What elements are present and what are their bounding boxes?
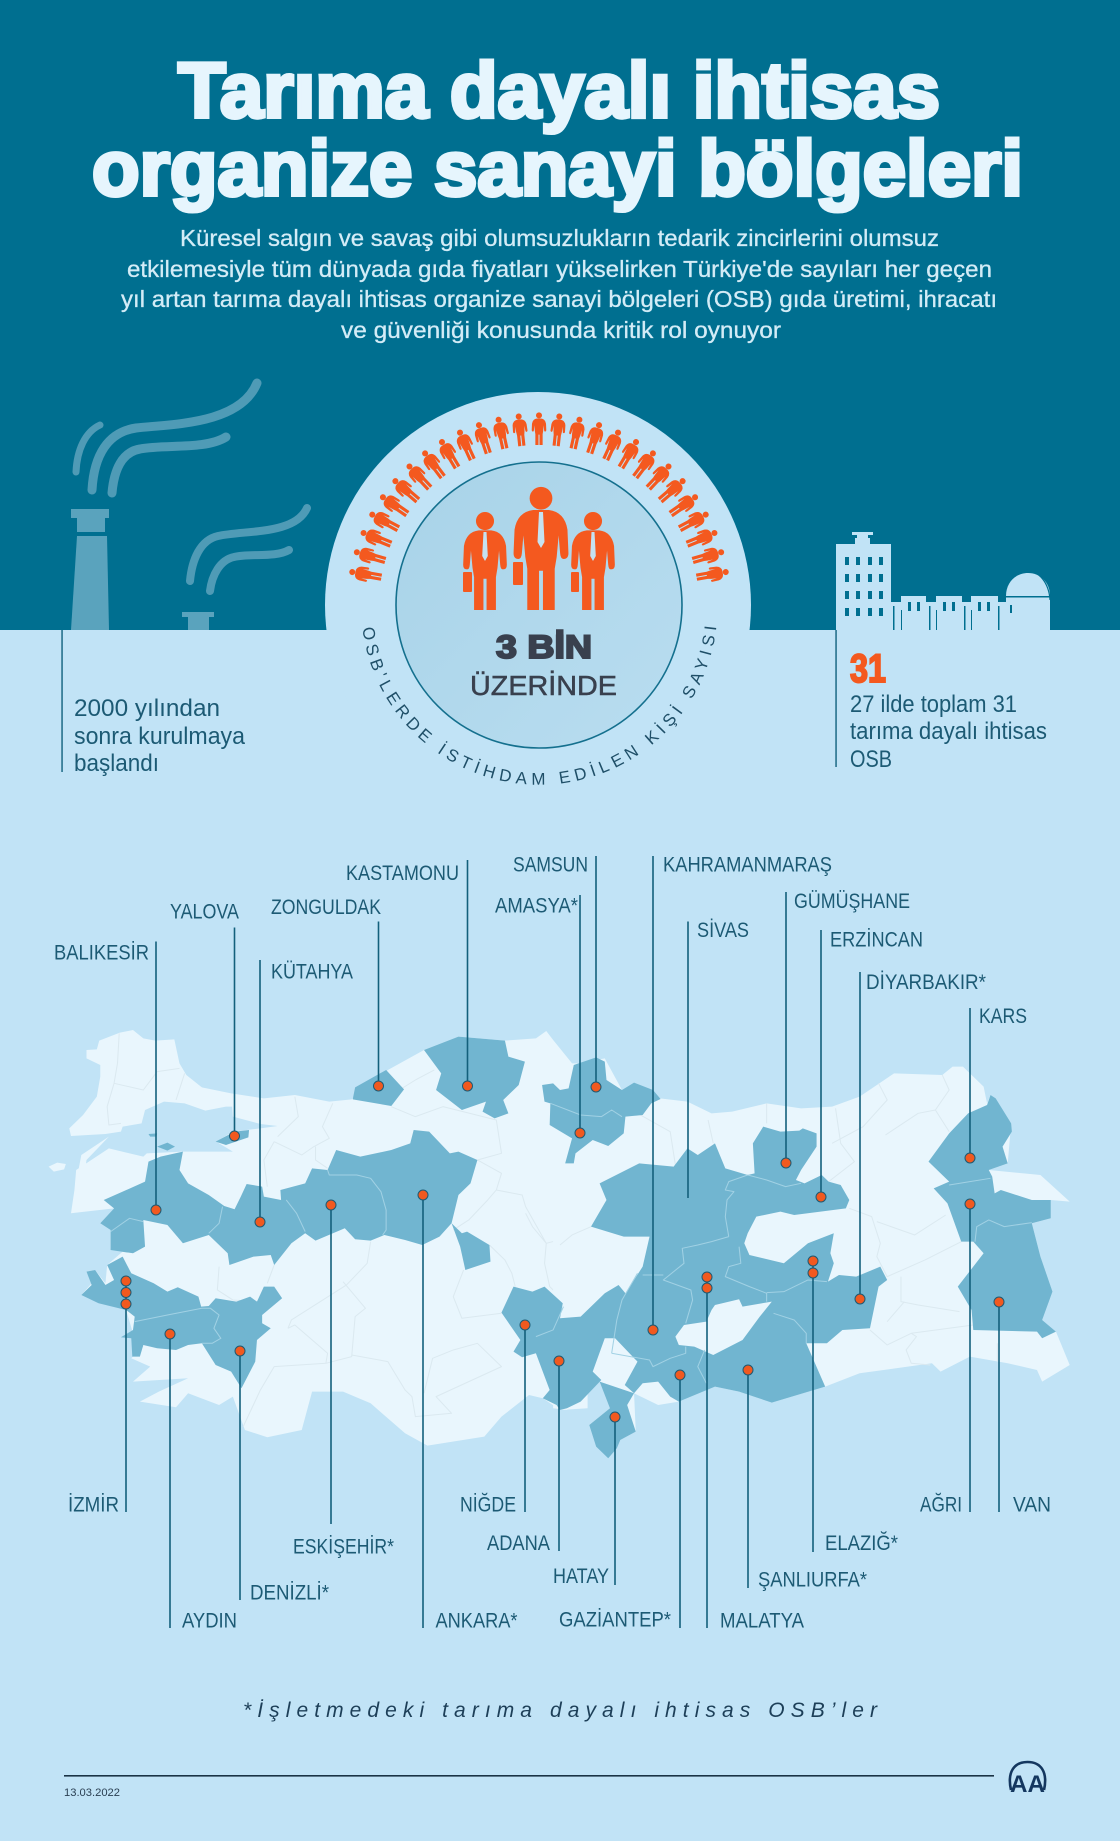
label: Elazig	[808, 1256, 898, 1555]
footnote: *İşletmedeki tarıma dayalı ihtisas OSB’ler	[243, 1699, 878, 1722]
label: Malatya: MALATYA	[720, 1610, 804, 1633]
icon: three business people	[463, 487, 615, 610]
label: Aydin: AYDIN	[182, 1610, 237, 1633]
label: Nigde: NİĞDE	[460, 1493, 516, 1516]
label: Malatya	[702, 1272, 804, 1633]
label: Erzincan: ERZİNCAN	[830, 929, 923, 952]
label: Sivas: SİVAS	[697, 919, 749, 942]
label: Zonguldak: ZONGULDAK	[271, 896, 381, 919]
callout: since 2000: sonra kurulmaya	[74, 723, 246, 750]
label: Diyarbakir	[855, 971, 986, 1304]
label: Adana: ADANA	[487, 1532, 550, 1555]
title: organize sanayi bölgeleri	[92, 124, 1023, 212]
label: Gaziantep	[559, 1370, 685, 1632]
icon: AA logo: AA	[1010, 1771, 1045, 1798]
label: Sanliurfa: ŞANLIURFA*	[758, 1568, 867, 1592]
label: Balikesir: BALIKESİR	[54, 942, 149, 965]
label: Kahramanmaras: KAHRAMANMARAŞ	[663, 854, 832, 876]
label: Kars: KARS	[979, 1005, 1027, 1028]
icon: factory chimneys with smoke	[71, 383, 307, 630]
label: Diyarbakir: DİYARBAKIR*	[866, 971, 986, 994]
callout: since 2000	[61, 630, 246, 777]
label: Nigde	[460, 1320, 530, 1516]
label: Kastamonu	[346, 860, 472, 1091]
header band	[0, 0, 1120, 630]
label: Ankara	[418, 1190, 518, 1633]
label: Van	[994, 1297, 1051, 1516]
intro paragraph: Küresel salgın ve savaş gibi olumsuzlukların tedarik zincirlerini olumsuz	[180, 225, 939, 251]
inner circle	[396, 462, 682, 748]
callout: 31 OSB: tarıma dayalı ihtisas	[850, 718, 1047, 745]
callout: 31 OSB	[835, 630, 1047, 773]
callout: 31 OSB: 31	[850, 647, 886, 691]
label: Izmir	[68, 1276, 131, 1516]
ring of small workers	[348, 412, 730, 584]
label: Yalova: YALOVA	[170, 900, 239, 924]
label: Aydin	[165, 1329, 237, 1633]
label: Ankara: ANKARA*	[436, 1610, 518, 1633]
label: Sanliurfa	[743, 1365, 867, 1592]
callout: 31 OSB: OSB	[850, 746, 892, 773]
label: Kutahya: KÜTAHYA	[271, 960, 353, 983]
title	[92, 46, 1023, 212]
label: Kahramanmaras	[648, 854, 832, 1335]
label: Kars	[965, 1005, 1027, 1163]
label: Gumushane	[781, 890, 910, 1168]
label: Amasya: AMASYA*	[495, 895, 578, 918]
panel: employment circle	[325, 392, 751, 785]
label: Van: VAN	[1013, 1493, 1051, 1516]
figure: 3 bin: 3 BİN	[496, 629, 592, 665]
title: Tarıma dayalı ihtisas	[178, 46, 940, 134]
label: Adana	[487, 1356, 564, 1555]
label: Agri: AĞRI	[920, 1493, 962, 1516]
label: Kastamonu: KASTAMONU	[346, 862, 459, 885]
label: Amasya	[495, 895, 585, 1138]
arc caption: OSB'LERDE İSTİHDAM EDİLEN KİŞİ SAYISI	[363, 626, 716, 785]
figure: uzerinde: ÜZERİNDE	[470, 670, 617, 701]
intro paragraph: etkilemesiyle tüm dünyada gıda fiyatları yükselirken Türkiye'de sayıları her geçen	[127, 256, 992, 282]
intro paragraph: ve güvenliği konusunda kritik rol oynuyor	[341, 317, 781, 343]
label: Hatay	[553, 1412, 620, 1588]
callout: since 2000: başlandı	[74, 750, 159, 777]
label: Izmir: İZMİR	[68, 1493, 119, 1516]
label: Balikesir	[54, 942, 161, 1215]
label: Agri	[920, 1199, 975, 1516]
footer rule	[64, 1775, 994, 1777]
map of Turkey	[49, 1030, 1070, 1458]
callout: since 2000: 2000 yılından	[74, 695, 220, 722]
label: Denizli: DENİZLİ*	[250, 1582, 329, 1604]
label: Gumushane: GÜMÜŞHANE	[794, 890, 910, 913]
label: Samsun: SAMSUN	[513, 854, 588, 876]
label: Eskisehir: ESKİŞEHİR*	[293, 1536, 394, 1559]
label: Hatay: HATAY	[553, 1565, 609, 1588]
label: Erzincan	[816, 929, 923, 1202]
label: Kutahya	[255, 960, 353, 1227]
label: Denizli	[235, 1346, 329, 1604]
label: Elazig: ELAZIĞ*	[825, 1532, 898, 1555]
icon: city buildings	[836, 532, 1050, 630]
intro paragraph	[121, 225, 997, 343]
label: Yalova	[170, 900, 240, 1141]
intro paragraph: yıl artan tarıma dayalı ihtisas organize sanayi bölgeleri (OSB) gıda üretimi, ihracatı	[121, 286, 997, 312]
date: 13.03.2022	[64, 1787, 120, 1799]
label: Eskisehir	[293, 1200, 394, 1559]
callout: 31 OSB: 27 ilde toplam 31	[850, 691, 1017, 718]
label: Zonguldak	[271, 896, 384, 1091]
label: Gaziantep: GAZİANTEP*	[559, 1608, 671, 1632]
label: Samsun	[513, 854, 601, 1092]
